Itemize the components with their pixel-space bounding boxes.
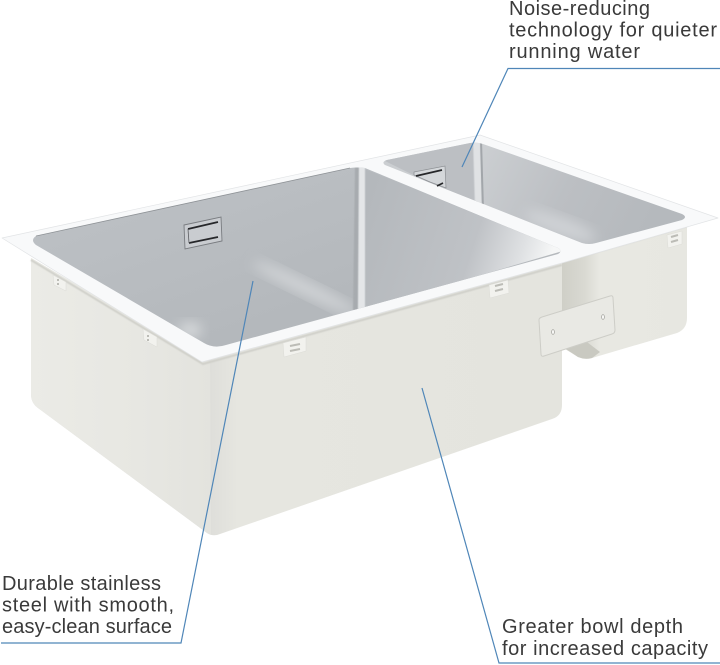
small bowl interior: [384, 142, 685, 244]
large bowl front face: [31, 258, 211, 534]
callout text: [2, 573, 174, 638]
callout: stainless steel: [1, 281, 253, 643]
leader line: [462, 68, 720, 167]
callout text: Greater bowl depth: [502, 616, 683, 638]
callout text: running water: [509, 41, 640, 63]
callout: noise-reducing technology: [462, 0, 720, 167]
callout text: Durable stainless: [2, 573, 161, 595]
clip 3: [283, 337, 306, 357]
clip slots: [58, 235, 678, 351]
callout text: easy-clean surface: [2, 616, 172, 638]
callout: bowl depth: [422, 388, 720, 663]
right wall of large bowl: [362, 210, 560, 308]
callout text: for increased capacity: [502, 638, 708, 660]
leader line: [1, 281, 253, 643]
callout text: technology for quieter: [509, 20, 717, 42]
large bowl interior: [33, 168, 560, 347]
rim shadow on body: [31, 226, 687, 364]
rim: [2, 135, 718, 362]
large bowl top edge: [36, 168, 350, 236]
callout text: steel with smooth,: [2, 594, 174, 616]
overflow: large bowl: [184, 217, 222, 249]
bright corner crease: [472, 142, 482, 203]
clip 1: [53, 275, 66, 291]
clip 5: [667, 231, 682, 248]
mounting bracket: [539, 296, 615, 356]
leader line: [422, 388, 720, 663]
small bowl body: [562, 222, 687, 359]
shadow facet under bracket: [562, 339, 600, 359]
callout text: [502, 616, 708, 660]
bracket holes: [552, 315, 604, 334]
bright corner crease: [353, 165, 359, 310]
overflow: small bowl: [414, 166, 446, 188]
clip 4: [489, 280, 509, 298]
large bowl body: [31, 258, 562, 535]
mounting clips: [53, 231, 682, 357]
callout text: [509, 0, 717, 63]
clip 2: [143, 329, 157, 347]
sink illustration: [2, 135, 718, 535]
